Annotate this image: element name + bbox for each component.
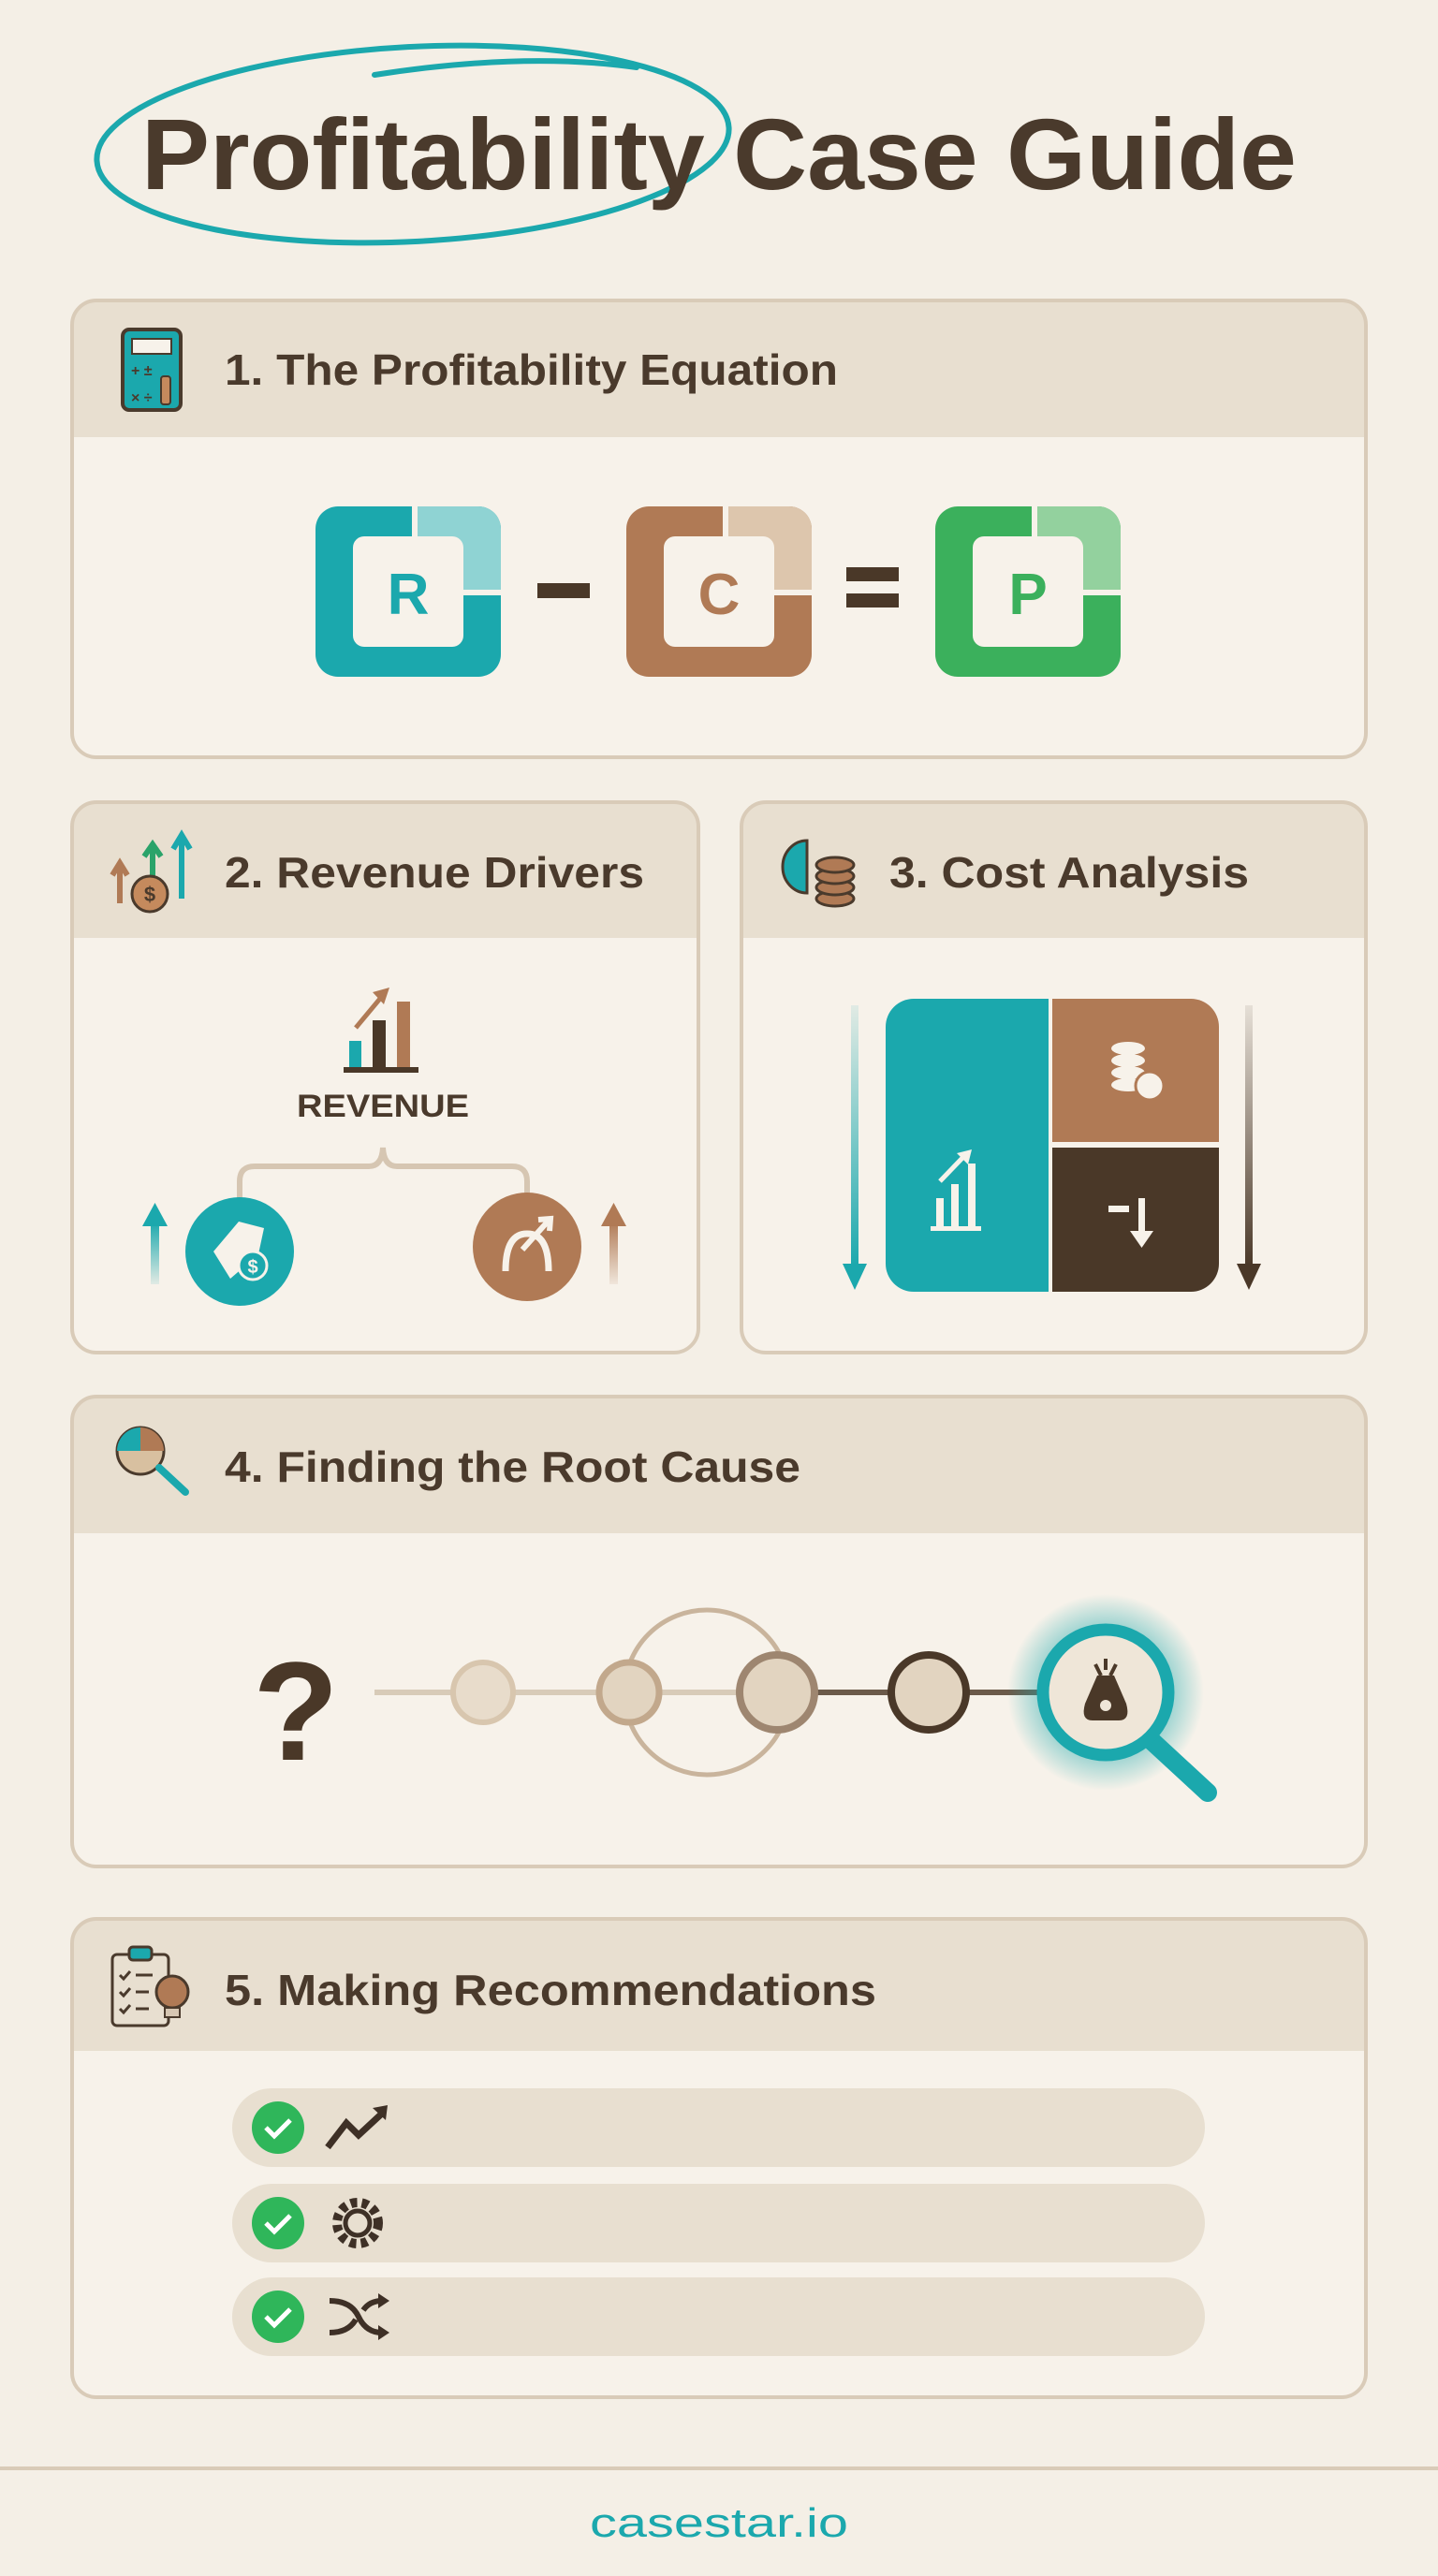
arrow: teal down	[843, 1005, 867, 1290]
label: revenue: REVENUE	[297, 1089, 469, 1124]
bracket	[240, 1148, 527, 1222]
icon: price tag circle: $	[247, 1257, 258, 1278]
icon: calculator: + ±	[131, 363, 153, 379]
arrow: teal up	[142, 1203, 168, 1284]
icon: pie and coins	[783, 841, 854, 906]
tile: P	[935, 506, 1121, 677]
row: strategy	[232, 2277, 1205, 2356]
arrow: dark down	[1237, 1005, 1261, 1290]
title: Profitability Case Guide	[141, 97, 1297, 211]
panel: cost analysis	[741, 802, 1366, 1353]
panel: profitability equation	[72, 300, 1366, 757]
root cause chain	[374, 1610, 1049, 1775]
heading: 2: 2. Revenue Drivers	[225, 848, 644, 897]
icon: revenue arrows	[112, 835, 190, 912]
cost matrix	[886, 999, 1219, 1292]
icon: volume circle	[473, 1193, 581, 1301]
icon: magnifier with money bag	[1007, 1594, 1208, 1793]
heading: 4: 4. Finding the Root Cause	[225, 1442, 800, 1491]
tile: C	[626, 506, 812, 677]
heading: 1: 1. The Profitability Equation	[225, 345, 838, 394]
icon: question mark: ?	[253, 1632, 339, 1790]
tile: P: P	[1008, 563, 1048, 627]
panel: revenue drivers	[72, 802, 698, 1353]
panel: recommendations	[72, 1919, 1366, 2397]
icon: clipboard bulb	[112, 1947, 188, 2026]
icon: calculator: × ÷	[131, 390, 153, 406]
operator: minus	[537, 583, 590, 598]
operator: equals	[846, 567, 899, 607]
heading: 3: 3. Cost Analysis	[889, 848, 1249, 897]
tile: R: R	[388, 563, 429, 627]
icon: puzzle magnifier	[117, 1427, 185, 1492]
footer: casestar.io	[590, 2500, 848, 2546]
icon: revenue arrows: $	[144, 883, 155, 906]
icon: bar chart	[344, 988, 418, 1073]
arrow: brown up	[601, 1203, 626, 1284]
heading: 5: 5. Making Recommendations	[225, 1966, 876, 2014]
row: growth	[232, 2088, 1205, 2167]
icon: calculator	[123, 329, 181, 410]
tile: R	[315, 506, 501, 677]
row: operations	[232, 2184, 1205, 2262]
panel: root cause	[72, 1397, 1366, 1866]
tile: C: C	[698, 563, 740, 627]
icon: price tag circle	[185, 1197, 294, 1306]
title	[92, 30, 1297, 258]
